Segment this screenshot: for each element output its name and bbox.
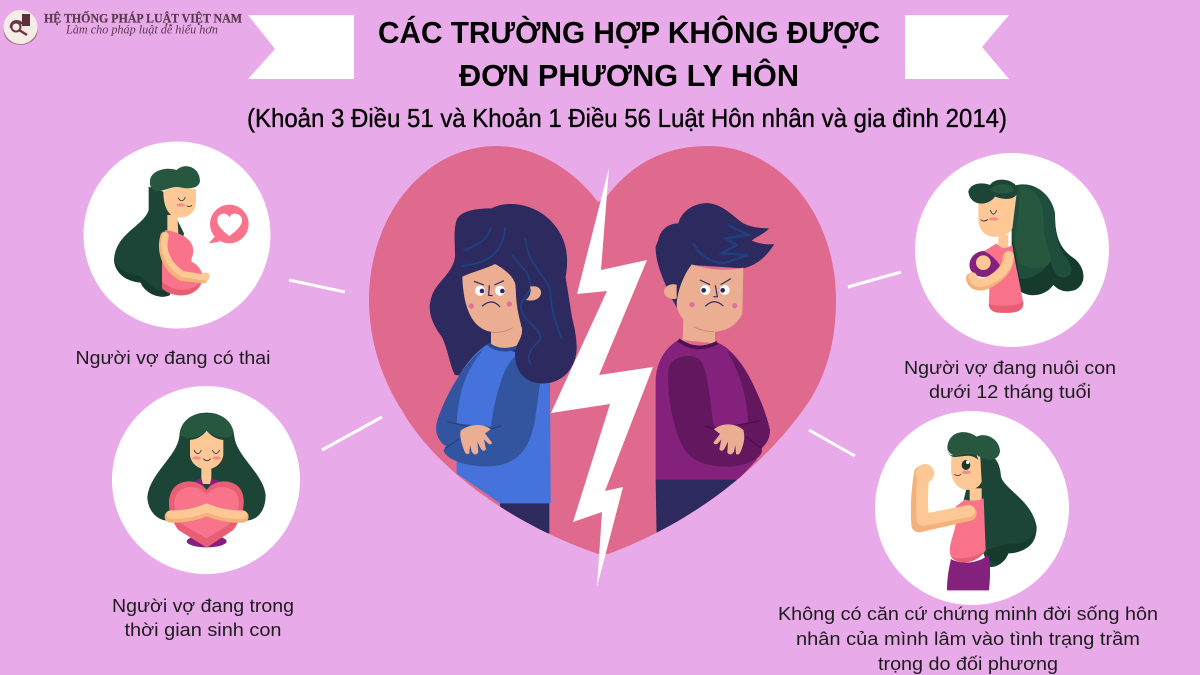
heart [369, 146, 836, 554]
icon: woman hugging heart [147, 413, 266, 548]
caption: pregnant: Người vợ đang có thai [76, 348, 270, 368]
icon: strong woman flexing [916, 432, 1037, 590]
caption: no proof [778, 604, 1158, 674]
caption: giving birth: thời gian sinh con [124, 620, 282, 640]
title: ĐƠN PHƯƠNG LY HÔN [459, 57, 799, 93]
panel: pregnant wife [84, 142, 270, 328]
caption: no proof: nhân của mình lâm vào tình trạng trầm [796, 629, 1140, 649]
logo text: Làm cho pháp luật dễ hiểu hơn [65, 22, 218, 36]
caption: nursing: Người vợ đang nuôi con [904, 358, 1116, 378]
man, angry [656, 203, 774, 540]
logo: law system [4, 10, 38, 45]
connector lines [289, 272, 901, 456]
ribbon left [248, 15, 354, 79]
lightning bolt [551, 168, 653, 587]
panel: nursing child under 12 months [915, 153, 1109, 347]
caption: no proof: trọng do đối phương [878, 654, 1058, 674]
icon: woman holding baby [968, 180, 1083, 313]
subtitle: (Khoản 3 Điều 51 và Khoản 1 Điều 56 Luật Hôn nhân và gia đình 2014) [247, 103, 1007, 133]
broken heart illustration [369, 146, 836, 587]
title [378, 14, 880, 93]
panel: no proof of serious marital state [875, 411, 1069, 605]
ribbon right [905, 15, 1009, 79]
title: CÁC TRƯỜNG HỢP KHÔNG ĐƯỢC [378, 14, 880, 50]
icon: pregnant woman with heart bubble [114, 166, 249, 297]
caption: nursing: dưới 12 tháng tuổi [929, 382, 1091, 402]
caption: giving birth [112, 596, 294, 640]
logo text: HỆ THỐNG PHÁP LUẬT VIỆT NAM [44, 10, 242, 26]
woman, angry [430, 204, 577, 533]
caption: giving birth: Người vợ đang trong [112, 596, 294, 616]
caption: nursing [904, 358, 1116, 402]
caption: no proof: Không có căn cứ chứng minh đời sống hôn [778, 604, 1158, 624]
panel: giving birth [112, 386, 300, 574]
logo text [44, 10, 242, 36]
